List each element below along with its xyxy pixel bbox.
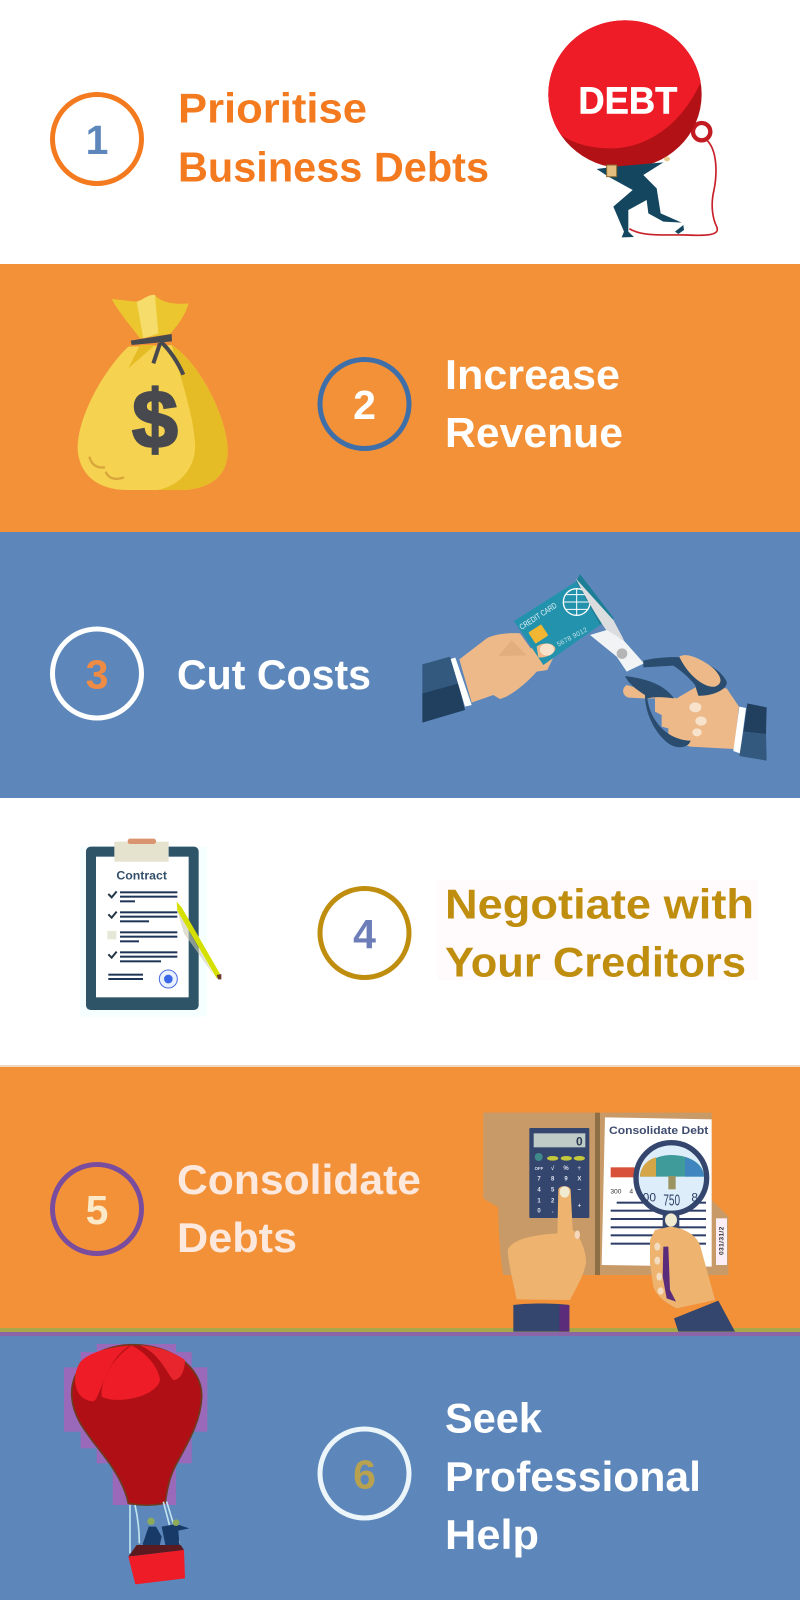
heading: negotiate with your creditors: Negotiate with	[445, 880, 754, 928]
icon: consolidate debt folder, calculator and magnifier: 9	[564, 1177, 568, 1183]
heading: consolidate debts: Consolidate	[177, 1156, 421, 1203]
heading: seek professional help: Help	[445, 1511, 539, 1558]
icon: consolidate debt folder, calculator and magnifier: 8	[691, 1191, 698, 1205]
icon: consolidate debt folder, calculator and magnifier: %	[563, 1166, 569, 1172]
icon: consolidate debt folder, calculator and magnifier: .	[552, 1209, 554, 1215]
icon: consolidate debt folder, calculator and magnifier: 300	[610, 1188, 622, 1195]
icon: money bag: $	[132, 374, 178, 465]
icon: consolidate debt folder, calculator and magnifier	[483, 1113, 735, 1332]
heading: consolidate debts: Debts	[177, 1214, 297, 1261]
icon: consolidate debt folder, calculator and magnifier: 0	[576, 1134, 583, 1148]
icon: hot air balloon	[64, 1344, 207, 1584]
panel: step 6 seek professional help	[0, 1332, 800, 1600]
number badge 2: 2	[353, 382, 376, 428]
icon: consolidate debt folder, calculator and magnifier: 4	[537, 1187, 541, 1193]
icon: consolidate debt folder, calculator and magnifier: −	[578, 1187, 582, 1193]
number badge 1	[52, 94, 142, 184]
heading: increase revenue	[445, 351, 623, 456]
panel: step 4 negotiate with creditors	[0, 798, 800, 1065]
panel: step 1 prioritise business debts	[0, 0, 800, 264]
heading: cut costs: Cut Costs	[177, 651, 371, 698]
number badge 6: 6	[353, 1452, 376, 1498]
number badge 6	[320, 1429, 409, 1518]
heading: prioritise business debts: Prioritise	[178, 84, 367, 132]
heading: prioritise business debts	[178, 84, 489, 190]
icon: consolidate debt folder, calculator and magnifier: +	[578, 1203, 582, 1209]
icon: consolidate debt folder, calculator and magnifier: ÷	[578, 1166, 582, 1172]
number badge 1: 1	[86, 117, 108, 163]
icon: contract clipboard	[80, 839, 221, 1017]
panel: step 3 cut costs	[0, 532, 800, 798]
number badge 4	[320, 888, 409, 978]
panel: step 5 consolidate debts	[0, 1065, 800, 1332]
icon: consolidate debt folder, calculator and magnifier: 031/31/2	[718, 1226, 725, 1255]
icon: consolidate debt folder, calculator and magnifier: 750	[663, 1193, 680, 1210]
heading: consolidate debts	[177, 1156, 421, 1261]
heading: seek professional help	[445, 1394, 701, 1558]
number badge 5	[52, 1164, 142, 1254]
number badge 2	[320, 360, 409, 448]
icon: hands cutting credit card: 5678 9012	[556, 626, 589, 648]
icon: consolidate debt folder, calculator and magnifier: 7	[537, 1177, 541, 1183]
icon: consolidate debt folder, calculator and magnifier: 4	[629, 1188, 633, 1195]
icon: consolidate debt folder, calculator and magnifier: √	[551, 1165, 555, 1172]
heading: increase revenue: Increase	[445, 351, 620, 398]
icon: consolidate debt folder, calculator and magnifier: 0	[537, 1209, 541, 1215]
heading: negotiate with your creditors: Your Creditors	[445, 938, 746, 986]
number badge 4: 4	[353, 911, 376, 957]
heading: seek professional help: Professional	[445, 1453, 701, 1500]
icon: consolidate debt folder, calculator and magnifier: OFF	[535, 1166, 544, 1171]
icon: hands cutting credit card: CREDIT CARD	[518, 601, 559, 632]
heading: negotiate with your creditors	[445, 880, 754, 986]
heading: increase revenue: Revenue	[445, 409, 623, 456]
icon: consolidate debt folder, calculator and magnifier: 1	[537, 1198, 541, 1204]
heading: seek professional help: Seek	[445, 1394, 543, 1442]
icon: consolidate debt folder, calculator and magnifier: Consolidate Debt	[609, 1125, 709, 1137]
panel: step 2 increase revenue	[0, 264, 800, 532]
icon: consolidate debt folder, calculator and magnifier: 8	[551, 1177, 555, 1183]
icon: hands cutting credit card	[422, 574, 767, 761]
heading: prioritise business debts: Business Debts	[178, 144, 489, 190]
icon: man carrying debt ball	[548, 20, 717, 237]
icon: consolidate debt folder, calculator and magnifier: 00	[643, 1191, 656, 1205]
number badge 3: 3	[86, 652, 108, 698]
number badge 3	[52, 629, 142, 718]
icon: money bag	[78, 295, 228, 490]
icon: man carrying debt ball: DEBT	[578, 80, 677, 122]
text halo	[438, 880, 758, 980]
icon: consolidate debt folder, calculator and magnifier: 5	[551, 1187, 555, 1193]
icon: consolidate debt folder, calculator and magnifier: X	[577, 1177, 581, 1183]
icon: consolidate debt folder, calculator and magnifier: 2	[551, 1198, 555, 1204]
icon: contract clipboard: Contract	[116, 868, 167, 882]
number badge 5: 5	[86, 1187, 108, 1233]
